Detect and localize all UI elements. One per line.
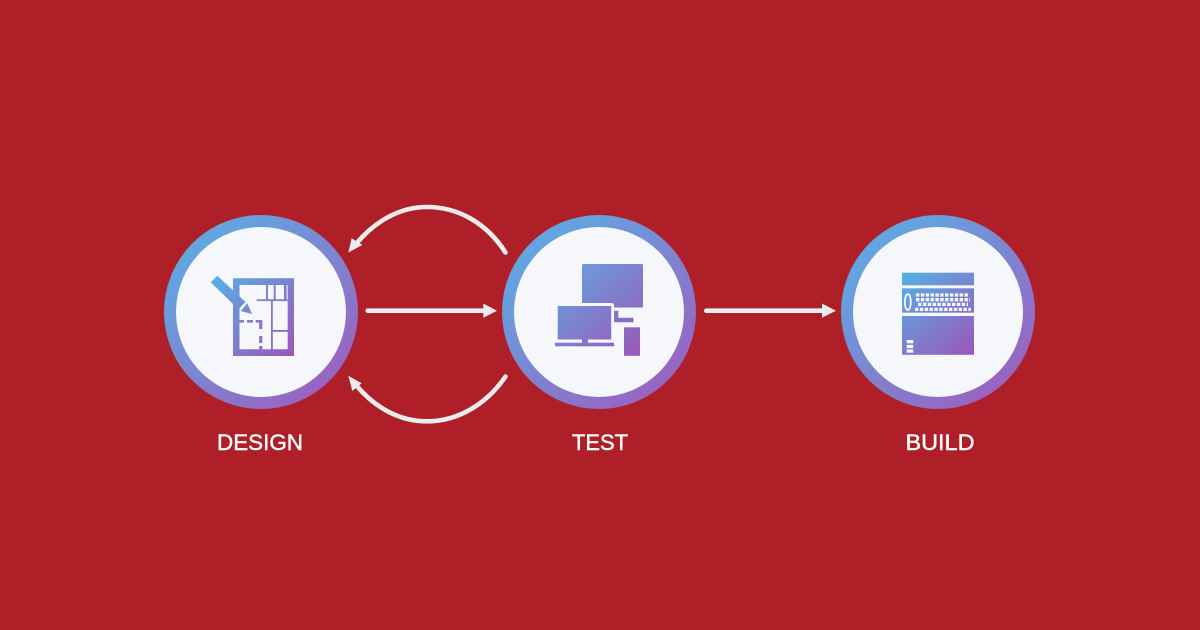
node: design circle [170,221,352,403]
icon: desktop monitors and tower [555,264,643,356]
arrow: test to build [704,304,836,318]
label: design: DESIGN [217,430,303,455]
arrow: design to test [366,304,497,318]
icon: floor plan with pencil [211,276,294,356]
node: test circle [508,221,690,403]
node: build circle [847,221,1029,403]
arrow: test back to design, upper [348,207,506,252]
label: test: TEST [572,430,628,455]
arrow: test back to design, lower [348,376,506,421]
icon: server panel [902,273,974,355]
label: build: BUILD [906,430,974,455]
